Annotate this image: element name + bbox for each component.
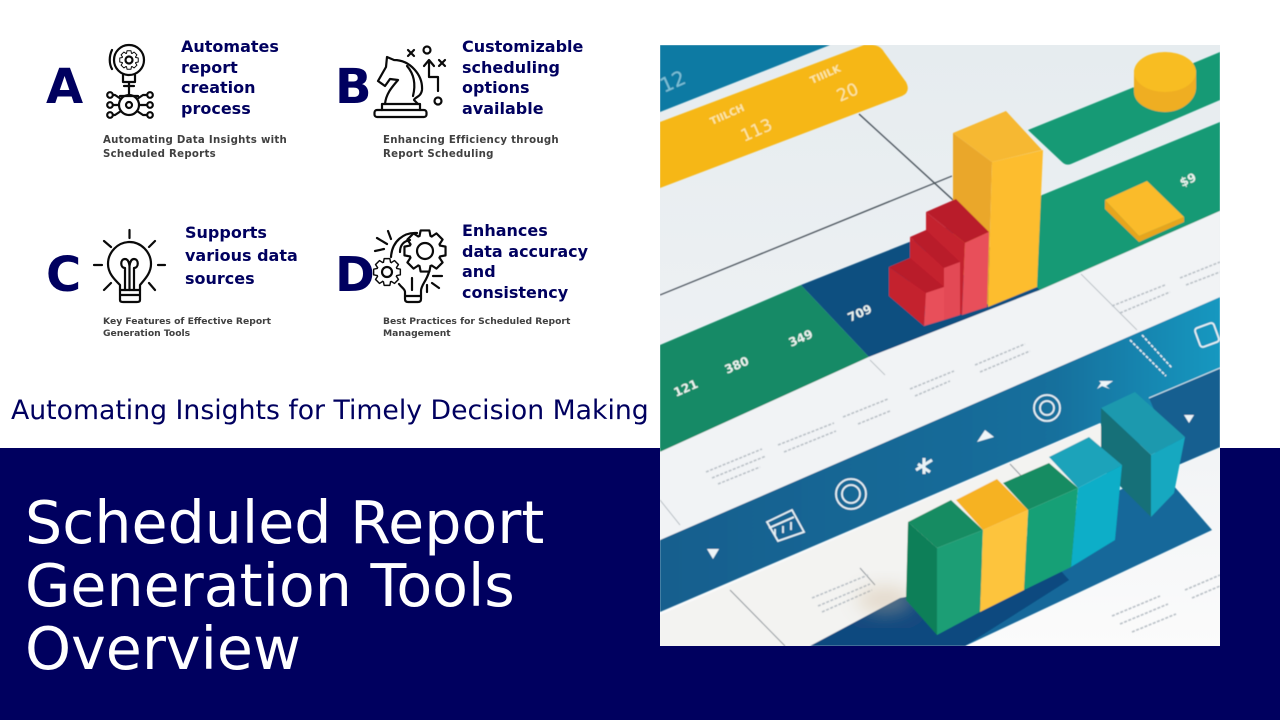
caption C: Key Features of Effective Report bbox=[103, 316, 271, 327]
feature text D bbox=[462, 221, 588, 302]
top blue band bbox=[660, 45, 830, 112]
feature text B bbox=[462, 37, 583, 118]
triangle markers bbox=[707, 381, 1194, 559]
middle right green band bbox=[1020, 122, 1220, 292]
title: Overview bbox=[25, 615, 301, 683]
green bar middle bbox=[1003, 463, 1078, 590]
panel: feature D bbox=[335, 221, 588, 339]
illustration: isometric dashboard with 3D bars bbox=[660, 45, 1220, 646]
printed labels: 121 bbox=[672, 377, 700, 400]
sheet background bbox=[660, 45, 1220, 646]
feature text B: Customizable bbox=[462, 37, 583, 56]
feature text D: data accuracy bbox=[462, 242, 588, 261]
icon: calendar bbox=[767, 510, 804, 541]
soft shadow under bars bbox=[857, 586, 913, 614]
small table text bbox=[706, 262, 1220, 632]
icon: badge circle bbox=[836, 479, 866, 509]
green front bar bbox=[906, 500, 983, 635]
grid lines bbox=[660, 114, 953, 295]
feature text D: consistency bbox=[462, 283, 568, 302]
icon band glyphs bbox=[767, 322, 1220, 541]
feature text C: sources bbox=[185, 269, 255, 288]
panel: feature C bbox=[46, 223, 298, 339]
feature text A: report bbox=[181, 58, 238, 77]
feature text C: various data bbox=[185, 246, 298, 265]
band edge caption bbox=[1130, 335, 1172, 376]
illustration: isometric dashboard with 3D bars: 113 bbox=[738, 115, 776, 147]
feature text D: Enhances bbox=[462, 221, 548, 240]
title: Scheduled Report bbox=[25, 489, 544, 557]
lower right navy cell bbox=[1149, 368, 1220, 465]
feature text A: Automates bbox=[181, 37, 279, 56]
navy title band bbox=[0, 448, 1280, 720]
caption B: Report Scheduling bbox=[383, 149, 494, 160]
tall orange bar bbox=[953, 111, 1043, 307]
feature text A: process bbox=[181, 99, 251, 118]
caption D: Management bbox=[383, 328, 451, 339]
caption C: Generation Tools bbox=[103, 328, 190, 339]
caption B bbox=[383, 135, 559, 160]
white table row bbox=[660, 211, 1220, 540]
panel: feature A bbox=[46, 37, 287, 160]
illustration: isometric dashboard with 3D bars: TIIILK bbox=[809, 63, 844, 87]
feature text A bbox=[181, 37, 279, 118]
letter C: C bbox=[46, 247, 81, 303]
lower blue base bbox=[810, 470, 1212, 646]
printed labels: 380 bbox=[723, 354, 751, 377]
title bbox=[25, 489, 544, 683]
caption B: Enhancing Efficiency through bbox=[383, 135, 559, 146]
title: Generation Tools bbox=[25, 552, 515, 620]
caption D bbox=[383, 316, 570, 339]
illustration: isometric dashboard with 3D bars: 20 bbox=[834, 79, 862, 107]
teal back bar bbox=[1101, 392, 1185, 517]
caption A: Scheduled Reports bbox=[103, 149, 216, 160]
illustration: isometric dashboard with 3D bars: TIILCH bbox=[709, 103, 746, 128]
caption A: Automating Data Insights with bbox=[103, 135, 287, 146]
top right green band bbox=[1028, 52, 1220, 165]
caption C bbox=[103, 316, 271, 339]
icon: document bbox=[1194, 322, 1220, 348]
yellow cylinder bbox=[1134, 52, 1196, 112]
red stair bars bbox=[889, 199, 989, 326]
icon: bulb with gear and network bbox=[106, 44, 154, 119]
letter D: D bbox=[335, 247, 375, 303]
icon: lightbulb bbox=[92, 228, 166, 304]
feature text C: Supports bbox=[185, 223, 267, 242]
feature text B: options bbox=[462, 78, 529, 97]
printed labels: 709 bbox=[846, 302, 874, 325]
table row separators bbox=[660, 274, 1137, 525]
caption A bbox=[103, 135, 287, 160]
teal front bar bbox=[1049, 437, 1122, 567]
feature text B: scheduling bbox=[462, 58, 560, 77]
icon: bulb with gears bbox=[372, 229, 447, 304]
subtitle: Automating Insights for Timely Decision Making bbox=[11, 395, 649, 426]
yellow band bbox=[660, 45, 908, 188]
caption D: Best Practices for Scheduled Report bbox=[383, 316, 570, 327]
letter A: A bbox=[46, 59, 83, 115]
printed labels: $9 bbox=[1178, 170, 1198, 190]
printed labels bbox=[672, 170, 1198, 400]
panel: feature B bbox=[335, 37, 583, 160]
icon: chess knight with strategy arrow bbox=[373, 45, 446, 118]
letter B: B bbox=[335, 59, 372, 115]
feature text B: available bbox=[462, 99, 544, 118]
navy cell bbox=[801, 222, 1040, 357]
blue icon band bbox=[660, 297, 1220, 612]
yellow front bar bbox=[956, 479, 1028, 612]
left green cell bbox=[660, 285, 869, 452]
icon: data glyph bbox=[916, 458, 932, 474]
feature text A: creation bbox=[181, 78, 256, 97]
printed labels: 349 bbox=[787, 327, 815, 350]
feature text C bbox=[185, 223, 298, 288]
lower table rows (bottom white) bbox=[660, 425, 1130, 646]
feature text D: and bbox=[462, 262, 496, 281]
yellow flat block bbox=[1105, 181, 1184, 242]
icon: badge circle right bbox=[1034, 395, 1060, 421]
